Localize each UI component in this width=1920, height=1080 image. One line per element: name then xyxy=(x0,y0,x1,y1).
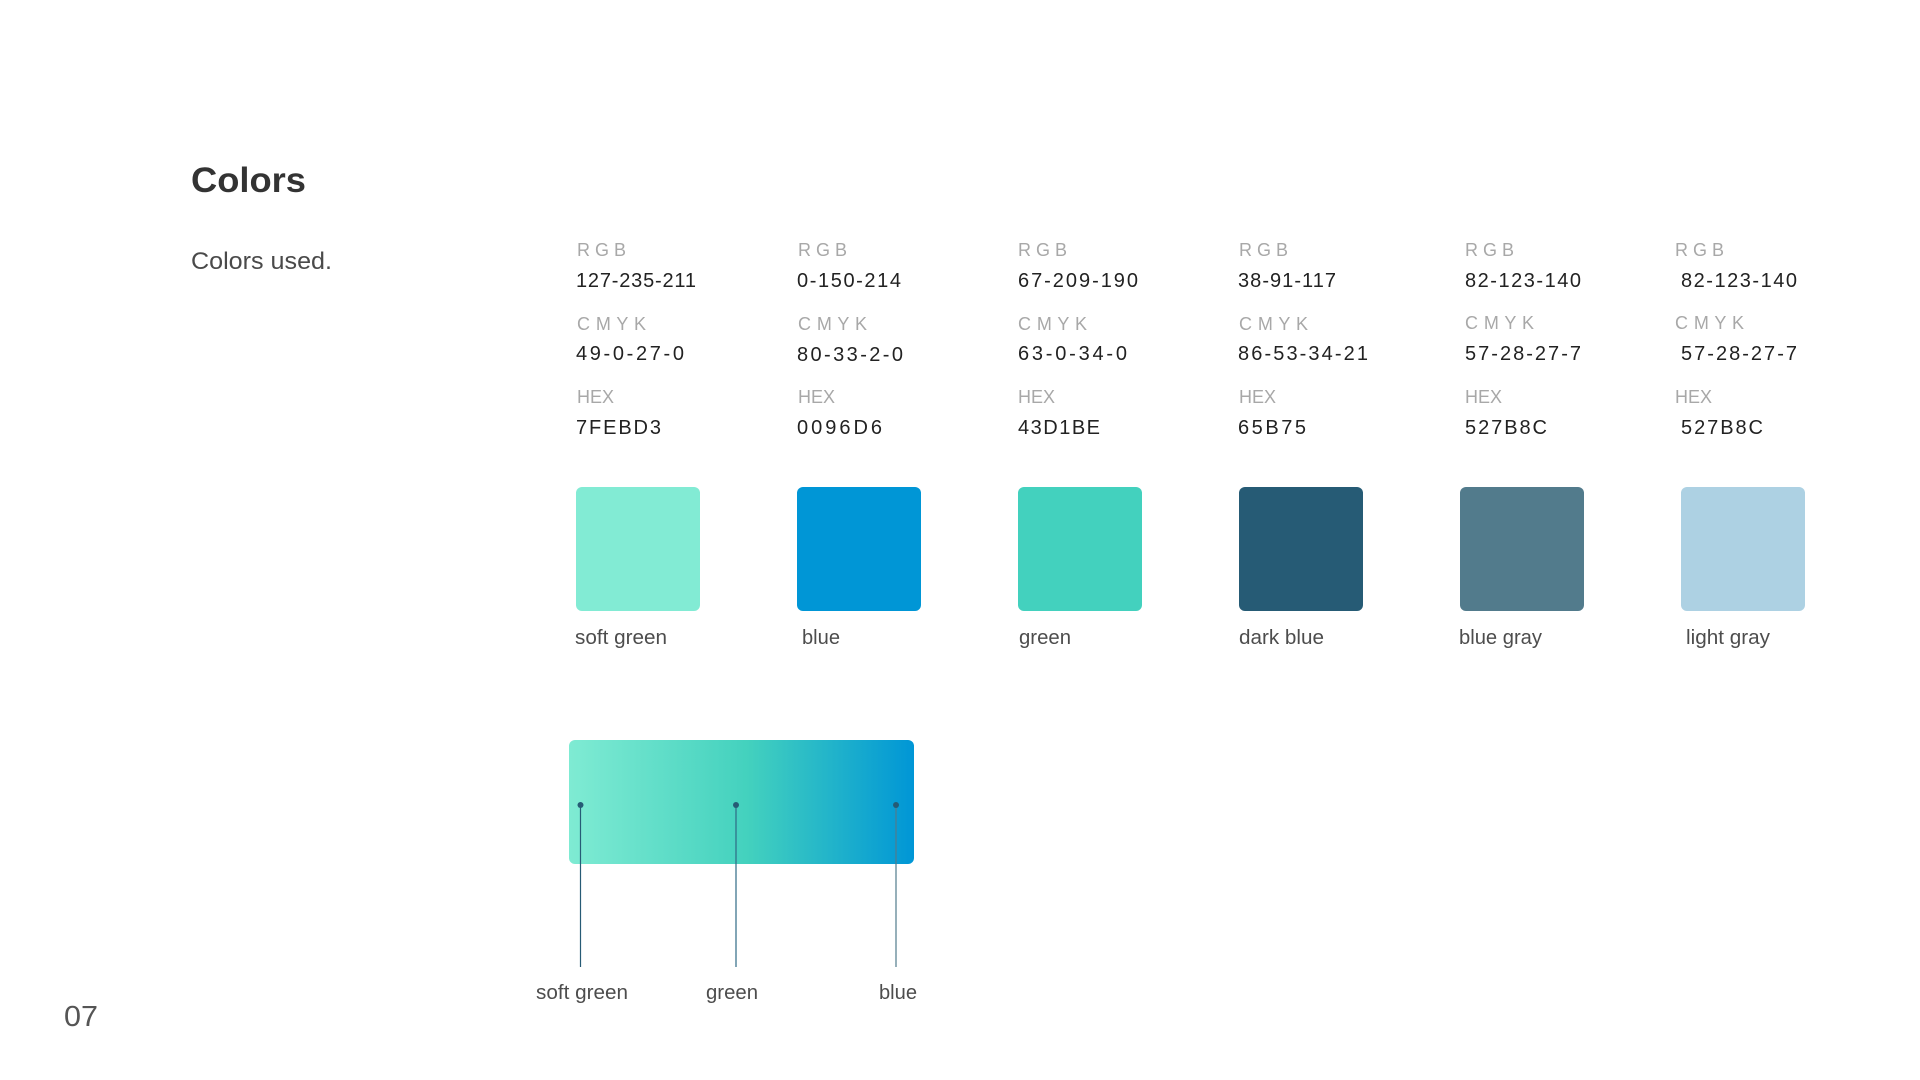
panel: green color: green xyxy=(1019,627,1071,649)
panel: dark blue color: R G B xyxy=(1239,240,1288,260)
panel: blue color: R G B xyxy=(798,240,847,260)
marker: soft green: soft green xyxy=(536,982,628,1004)
marker: blue: blue xyxy=(879,982,917,1004)
panel: blue color: blue xyxy=(802,627,840,649)
panel: blue color: HEX xyxy=(798,387,835,407)
panel: dark blue color: 38-91-117 xyxy=(1238,270,1336,292)
marker: blue xyxy=(879,802,917,1004)
panel: blue color: 0-150-214 xyxy=(797,270,901,292)
panel: blue gray color: 82-123-140 xyxy=(1465,270,1581,292)
marker: green: green xyxy=(706,982,758,1004)
panel: blue color: 80-33-2-0 xyxy=(797,344,903,366)
panel: green color: 43D1BE xyxy=(1018,417,1100,439)
panel: soft green color: 127-235-211 xyxy=(576,270,696,292)
panel: soft green color: soft green xyxy=(575,627,667,649)
panel: light gray color: HEX xyxy=(1675,387,1712,407)
panel: green color: HEX xyxy=(1018,387,1055,407)
panel: green color: 67-209-190 xyxy=(1018,270,1138,292)
panel: blue gray color: HEX xyxy=(1465,387,1502,407)
panel: light gray color: 57-28-27-7 xyxy=(1681,343,1797,365)
panel: light gray color: light gray xyxy=(1686,627,1770,649)
panel: soft green color: HEX xyxy=(577,387,614,407)
panel: dark blue color: 65B75 xyxy=(1238,417,1306,439)
page number: 07 xyxy=(64,1001,98,1033)
title: Colors xyxy=(191,161,306,200)
panel: soft green color: 7FEBD3 xyxy=(576,417,661,439)
panel: blue gray color: 57-28-27-7 xyxy=(1465,343,1581,365)
panel: dark blue color: HEX xyxy=(1239,387,1276,407)
panel: light gray color: 527B8C xyxy=(1681,417,1763,439)
panel: light gray color: C M Y K xyxy=(1675,313,1744,333)
panel: blue color: 0096D6 xyxy=(797,417,882,439)
panel: blue gray color: R G B xyxy=(1465,240,1514,260)
panel: light gray color: 82-123-140 xyxy=(1681,270,1797,292)
panel: blue gray color xyxy=(1459,240,1584,649)
panel: soft green color: R G B xyxy=(577,240,626,260)
panel: green color: 63-0-34-0 xyxy=(1018,343,1127,365)
panel: blue gray color: blue gray xyxy=(1459,627,1542,649)
panel: blue gray color: 527B8C xyxy=(1465,417,1547,439)
marker: soft green xyxy=(536,802,628,1004)
panel: green color xyxy=(1018,240,1142,649)
panel: light gray color: R G B xyxy=(1675,240,1724,260)
panel: dark blue color: 86-53-34-21 xyxy=(1238,343,1368,365)
panel: blue color xyxy=(797,240,921,649)
panel: dark blue color: dark blue xyxy=(1239,627,1324,649)
panel: green color: C M Y K xyxy=(1018,314,1087,334)
panel: dark blue color xyxy=(1238,240,1368,649)
description text: Colors used. xyxy=(191,248,332,275)
panel: green color: R G B xyxy=(1018,240,1067,260)
marker: green xyxy=(706,802,758,1004)
gradient bar xyxy=(569,740,914,864)
panel: dark blue color: C M Y K xyxy=(1239,314,1308,334)
panel: soft green color: 49-0-27-0 xyxy=(576,343,684,365)
panel: blue gray color: C M Y K xyxy=(1465,313,1534,333)
panel: soft green color xyxy=(575,240,700,649)
panel: soft green color: C M Y K xyxy=(577,314,646,334)
panel: blue color: C M Y K xyxy=(798,314,867,334)
panel: light gray color xyxy=(1675,240,1805,649)
